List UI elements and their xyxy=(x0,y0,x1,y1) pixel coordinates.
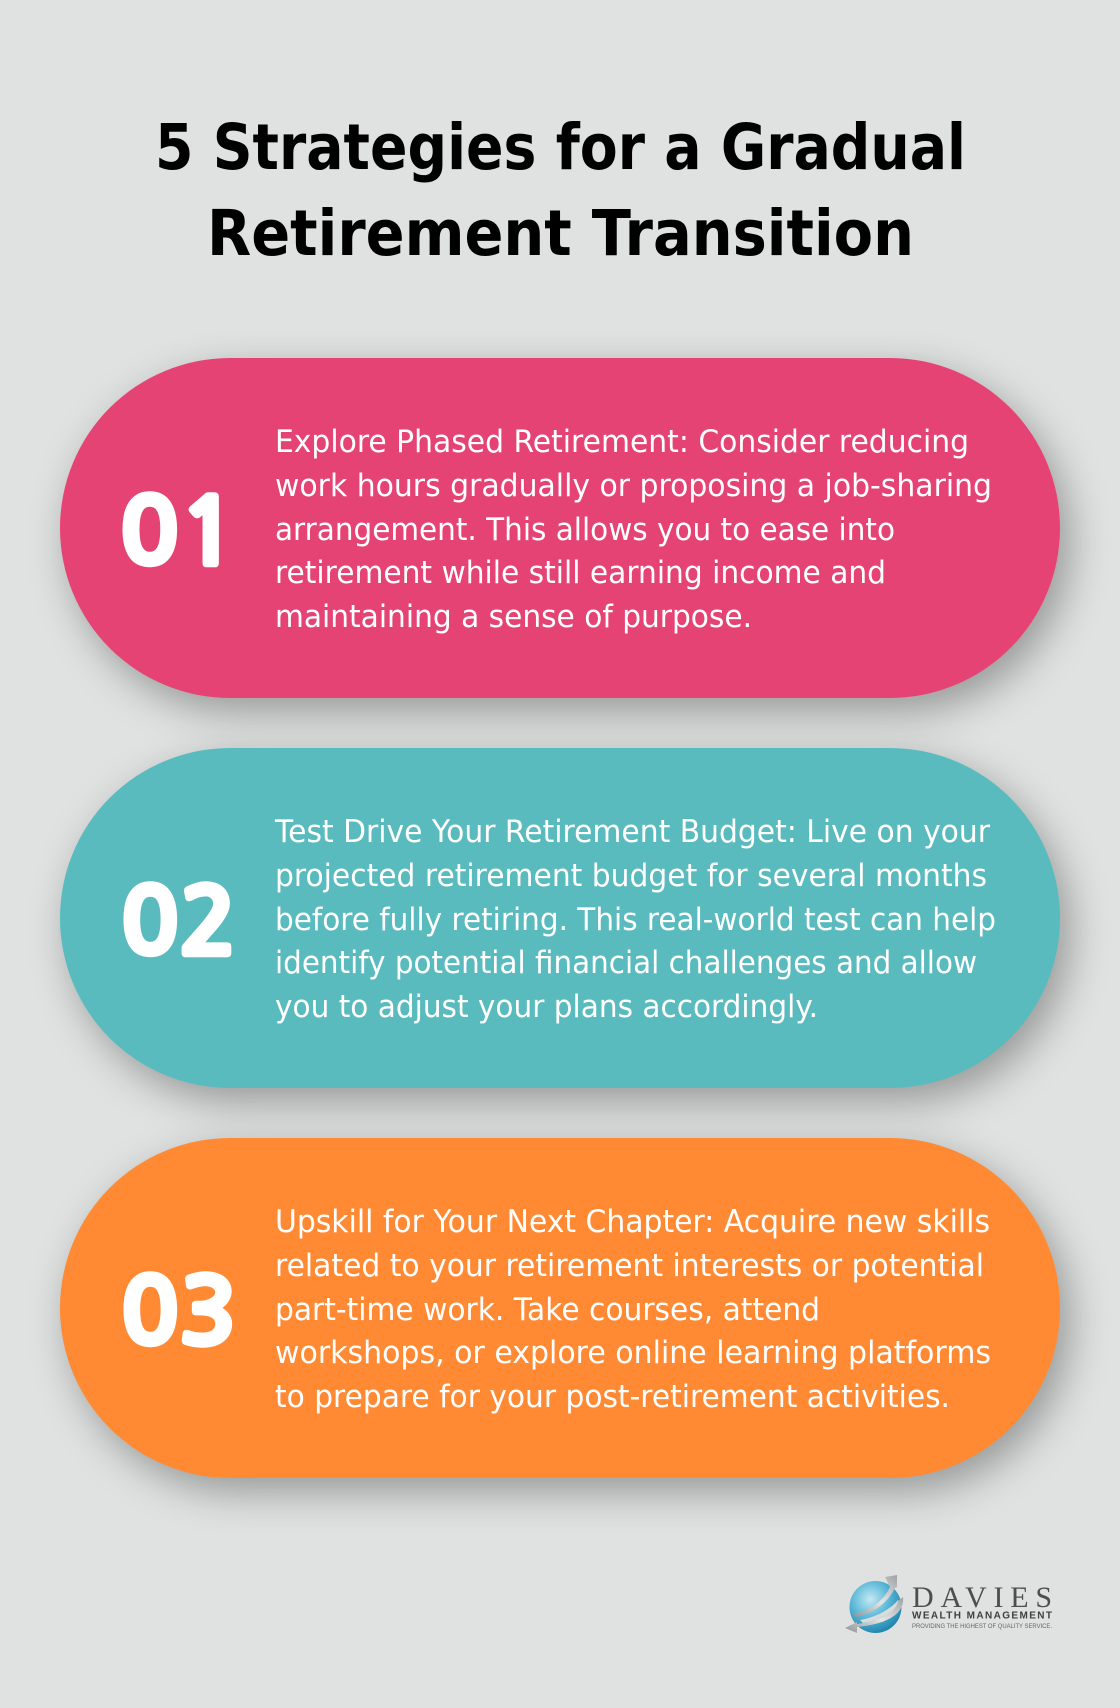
logo wordmark: DAVIES xyxy=(912,1581,1052,1614)
logo wordmark: PROVIDING THE HIGHEST OF QUALITY SERVICE. xyxy=(912,1623,1052,1630)
text block: retirement budget: projected retirement budget for several months xyxy=(275,858,987,894)
text block: retirement budget: before fully retiring. This real-world test can help xyxy=(275,902,996,938)
text block: upskill: related to your retirement interests or potential xyxy=(275,1248,984,1284)
text block: phased retirement: work hours gradually or proposing a job-sharing xyxy=(275,468,992,504)
text block: phased retirement: maintaining a sense of purpose. xyxy=(275,599,752,635)
text block: upskill: part-time work. Take courses, attend xyxy=(275,1292,820,1328)
text block: phased retirement: Explore Phased Retirement: Consider reducing xyxy=(275,424,969,460)
number 02: 02 xyxy=(121,877,237,968)
title: Retirement Transition xyxy=(207,197,914,270)
text block: retirement budget: you to adjust your plans accordingly. xyxy=(275,989,818,1025)
text block: upskill: Upskill for Your Next Chapter: Acquire new skills xyxy=(275,1204,990,1240)
title xyxy=(155,111,966,270)
panel: strategy 01 xyxy=(60,358,1060,698)
text block: upskill: workshops, or explore online learning platforms xyxy=(275,1335,991,1371)
panel: strategy 03 xyxy=(60,1138,1060,1478)
logo: Davies Wealth Management xyxy=(845,1575,1052,1633)
logo wordmark: WEALTH MANAGEMENT xyxy=(912,1610,1052,1622)
text block: upskill: to prepare for your post-retirement activities. xyxy=(275,1379,950,1415)
text block: retirement budget xyxy=(274,814,996,1025)
card background: pink pill xyxy=(60,358,1060,698)
text block: phased retirement xyxy=(275,424,992,635)
icon: globe with arrows xyxy=(845,1575,903,1633)
number 03: 03 xyxy=(121,1267,237,1358)
logo wordmark xyxy=(912,1581,1052,1630)
card background: teal pill xyxy=(60,748,1060,1088)
number 01: 01 xyxy=(120,487,238,578)
text block: upskill xyxy=(275,1204,991,1415)
text block: retirement budget: Test Drive Your Retirement Budget: Live on your xyxy=(274,814,990,850)
card background: orange pill xyxy=(60,1138,1060,1478)
panel: strategy 02 xyxy=(60,748,1060,1088)
text block: phased retirement: retirement while still earning income and xyxy=(275,555,886,591)
title: 5 Strategies for a Gradual xyxy=(155,111,966,184)
text block: phased retirement: arrangement. This allows you to ease into xyxy=(275,512,895,548)
text block: retirement budget: identify potential financial challenges and allow xyxy=(275,945,977,981)
